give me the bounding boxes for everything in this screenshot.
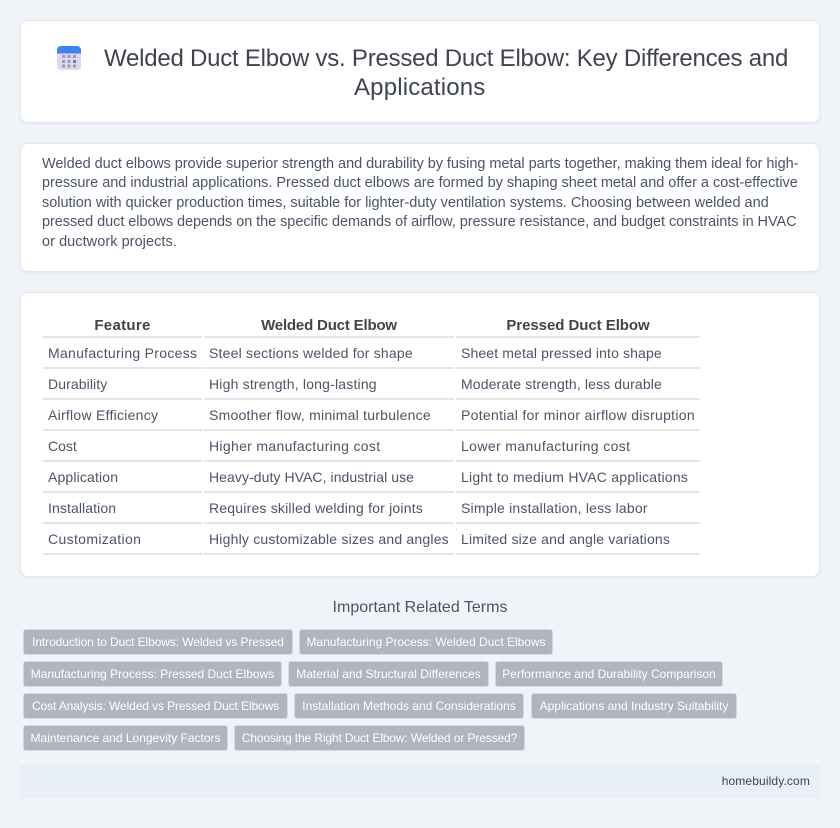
comparison table: Highly customizable sizes and angles	[209, 531, 449, 547]
related terms tags: Choosing the Right Duct Elbow: Welded or Pressed?	[242, 731, 517, 745]
related terms tags: Manufacturing Process: Pressed Duct Elbows	[31, 667, 274, 681]
comparison table: Customization	[48, 531, 141, 547]
comparison table: Steel sections welded for shape	[209, 345, 413, 361]
related terms tags: Applications and Industry Suitability	[540, 699, 728, 713]
related terms tags: Maintenance and Longevity Factors	[30, 731, 221, 745]
comparison table: Higher manufacturing cost	[209, 438, 380, 454]
comparison table: Heavy-duty HVAC, industrial use	[209, 469, 414, 485]
intro text	[42, 156, 798, 250]
related terms tags: Material and Structural Differences	[296, 667, 481, 681]
comparison table: Lower manufacturing cost	[461, 438, 630, 454]
comparison table: High strength, long-lasting	[209, 376, 377, 392]
comparison table: Application	[48, 469, 118, 485]
comparison table: Limited size and angle variations	[461, 531, 670, 547]
related terms tags: Performance and Durability Comparison	[502, 667, 716, 681]
comparison table: Welded Duct Elbow	[261, 317, 397, 334]
comparison table: Manufacturing Process	[48, 345, 197, 361]
title	[104, 45, 788, 101]
related terms tags: Cost Analysis: Welded vs Pressed Duct Elbows	[32, 699, 279, 713]
comparison table: Durability	[48, 376, 107, 392]
comparison table	[43, 317, 700, 555]
intro text: pressed duct elbows depends on the specific demands of airflow, pressure resistance, and budget constraints in HVAC	[42, 214, 797, 230]
comparison table: Simple installation, less labor	[461, 500, 648, 516]
related terms heading: Important Related Terms	[333, 599, 507, 616]
table panel	[20, 292, 820, 577]
comparison table: Smoother flow, minimal turbulence	[209, 407, 431, 423]
comparison table: Airflow Efficiency	[48, 407, 158, 423]
related terms tags: Introduction to Duct Elbows: Welded vs Pressed	[32, 635, 284, 649]
title: Welded Duct Elbow vs. Pressed Duct Elbow: Key Differences and	[104, 45, 788, 72]
comparison table: Potential for minor airflow disruption	[461, 407, 695, 423]
footer source: homebuildy.com	[722, 774, 810, 788]
intro text: pressure and industrial applications. Pressed duct elbows are formed by shaping sheet metal and offer a cost-effective	[42, 175, 798, 191]
comparison table: Moderate strength, less durable	[461, 376, 662, 392]
comparison table: Sheet metal pressed into shape	[461, 345, 662, 361]
related terms tags: Manufacturing Process: Welded Duct Elbows	[306, 635, 546, 649]
comparison table: Requires skilled welding for joints	[209, 500, 423, 516]
related terms tags	[23, 629, 737, 751]
comparison table: Installation	[48, 500, 116, 516]
intro text: solution with quicker production times, suitable for lighter-duty ventilation systems. Choosing between welded and	[42, 195, 769, 211]
comparison table: Feature	[94, 317, 151, 334]
comparison table: Pressed Duct Elbow	[506, 317, 650, 334]
comparison table: Cost	[48, 438, 77, 454]
header card	[20, 20, 820, 123]
comparison table: Light to medium HVAC applications	[461, 469, 688, 485]
related terms tags: Installation Methods and Considerations	[302, 699, 516, 713]
title: Applications	[354, 74, 485, 101]
intro panel	[20, 143, 820, 272]
footer bar	[20, 765, 820, 798]
intro text: or ductwork projects.	[42, 234, 177, 250]
icon: calendar grid	[57, 46, 81, 70]
intro text: Welded duct elbows provide superior strength and durability by fusing metal parts together, making them ideal for high-	[42, 156, 798, 172]
